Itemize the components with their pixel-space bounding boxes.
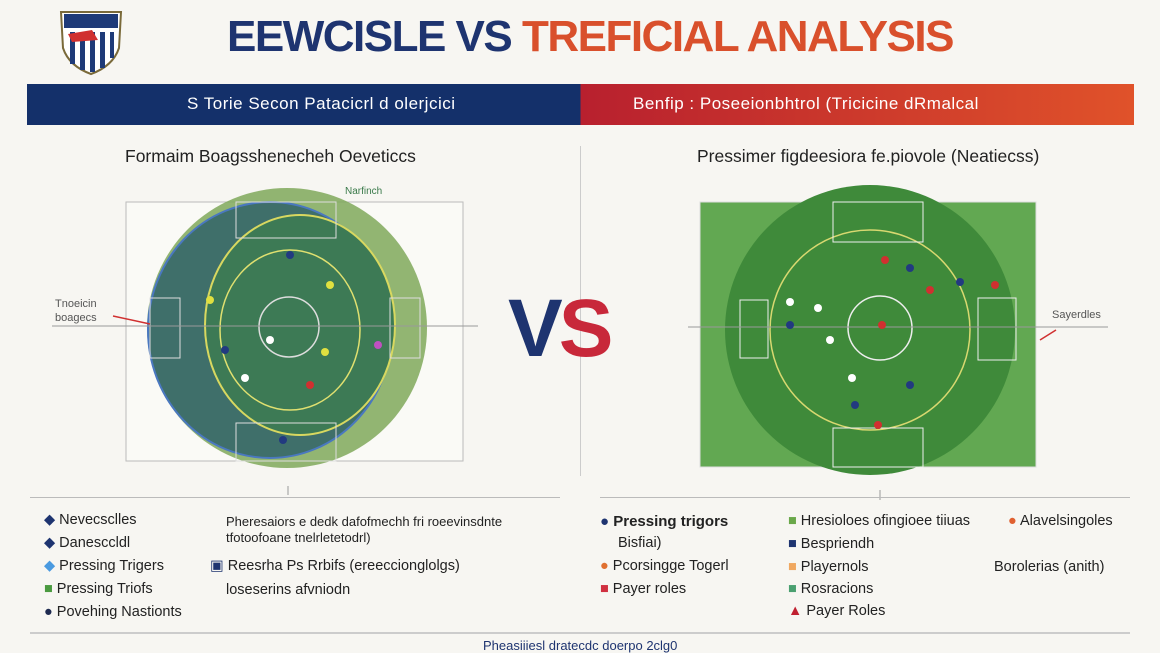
left pitch diagram: boagecs: [55, 312, 97, 324]
right legend: ● Pcorsingge Togerl: [600, 558, 729, 574]
banner: S Torie Secon Patacicrl d olerjcici: [187, 94, 456, 113]
right legend: ■ Playernols: [788, 559, 868, 575]
right legend: Borolerias (anith): [994, 559, 1104, 575]
footer text: Pheasiiiesl dratecdc doerpo 2clg0: [483, 638, 677, 653]
rules: [30, 497, 560, 498]
right pitch diagram: Sayerdles: [1052, 309, 1101, 321]
right heading: Pressimer figdeesiora fe.piovole (Neatiecss): [697, 146, 1039, 166]
left legend: ■ Pressing Triofs: [44, 581, 153, 597]
right legend: [600, 513, 1113, 619]
banner: [27, 84, 1134, 125]
left legend: ◆ Pressing Trigers: [44, 558, 164, 574]
left pitch diagram: Tnoeicin: [55, 298, 97, 310]
right legend: ● Alavelsingoles: [1008, 513, 1113, 529]
left legend: Pheresaiors e dedk dafofmechh fri roeevinsdnte: [226, 514, 502, 529]
right legend: ▲ Payer Roles: [788, 603, 885, 619]
left legend: [44, 512, 502, 620]
right legend: ■ Rosracions: [788, 581, 873, 597]
left pitch diagram: [52, 186, 478, 495]
divider: [580, 146, 581, 476]
right legend: ■ Payer roles: [600, 581, 686, 597]
right legend: ■ Bespriendh: [788, 536, 874, 552]
right pitch diagram: [688, 185, 1108, 500]
left heading: Formaim Boagsshenecheh Oeveticcs: [125, 146, 416, 166]
banner: Benfip : Poseeionbhtrol (Tricicine dRmalcal: [633, 94, 979, 113]
title: EEWCISLE VS TREFICIAL ANALYSIS: [227, 12, 953, 61]
left pitch diagram: Narfinch: [345, 186, 382, 197]
footer rule: [30, 632, 1130, 634]
left legend: ◆ Danesccldl: [44, 535, 130, 551]
left legend: ▣ Reesrha Ps Rrbifs (ereeccionglolgs): [210, 558, 460, 574]
logo: crest: [60, 11, 122, 76]
left legend: tfotoofoane tnelrletetodrl): [226, 530, 371, 545]
left legend: ● Povehing Nastionts: [44, 604, 182, 620]
left legend: ◆ Nevecsclles: [44, 512, 137, 528]
right legend: Bisfiai): [618, 535, 662, 551]
VS: VS: [508, 283, 609, 374]
right legend: ■ Hresioloes ofingioee tiiuas: [788, 513, 970, 529]
left legend: loseserins afvniodn: [226, 582, 350, 598]
right legend: ● Pressing trigors: [600, 513, 728, 530]
